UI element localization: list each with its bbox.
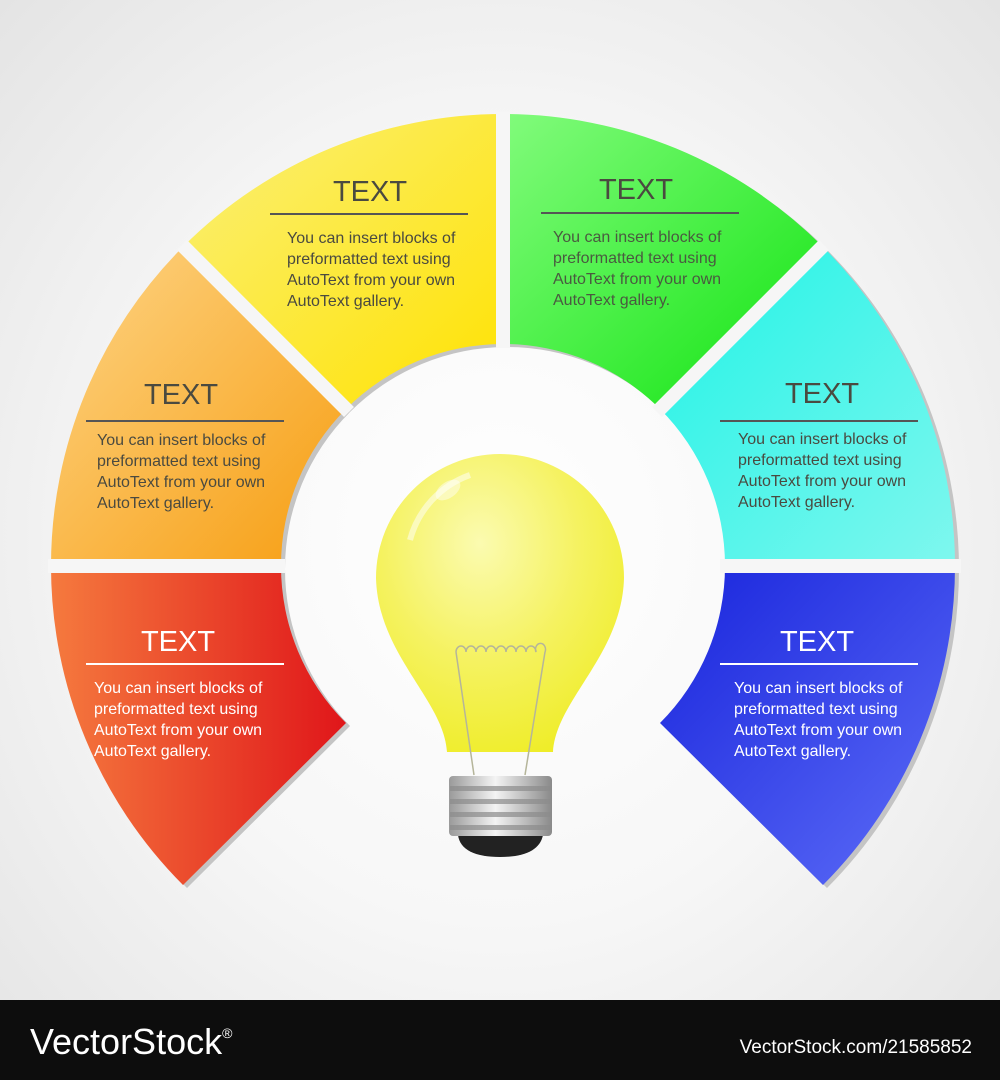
text: cyan: preformatted text using [738,452,902,469]
text: orange: AutoText gallery. [97,495,214,512]
text: red: preformatted text using [94,701,258,718]
text: red: TEXT [141,626,215,658]
footer bar: VectorStock [30,1021,222,1062]
text: cyan [720,378,918,511]
text: red: You can insert blocks of [94,680,263,697]
text: blue: TEXT [780,626,854,658]
text: orange: TEXT [144,379,218,411]
text: green: AutoText gallery. [553,292,670,309]
text: blue [720,626,918,760]
text: orange: preformatted text using [97,453,261,470]
footer bar: VectorStock.com/21585852 [740,1037,972,1058]
text: red: AutoText gallery. [94,743,211,760]
text: orange: AutoText from your own [97,474,265,491]
icon: light bulb [376,454,624,857]
footer bar [0,1000,1000,1080]
panel: cyan segment [660,246,959,569]
text: green [541,174,739,309]
text: blue: AutoText from your own [734,722,902,739]
panel: orange segment [51,246,350,569]
text: green: TEXT [599,174,673,206]
text: yellow: AutoText from your own [287,272,455,289]
text: cyan: AutoText gallery. [738,494,855,511]
text: yellow: You can insert blocks of [287,230,456,247]
text: red: AutoText from your own [94,722,262,739]
text: cyan: You can insert blocks of [738,431,907,448]
text: cyan: AutoText from your own [738,473,906,490]
text: yellow: AutoText gallery. [287,293,404,310]
panel: green segment [503,114,827,412]
text: red [86,626,284,760]
footer bar: ® [222,1025,233,1041]
text: orange: You can insert blocks of [97,432,266,449]
panel: blue segment [660,566,959,888]
panel: red segment [51,566,350,888]
text: yellow [270,176,468,310]
text: green: You can insert blocks of [553,229,722,246]
text: cyan: TEXT [785,378,859,410]
text: green: AutoText from your own [553,271,721,288]
text: orange [86,379,284,512]
text: blue: AutoText gallery. [734,743,851,760]
text: yellow: TEXT [333,176,407,208]
panel: yellow segment [183,114,507,412]
text: blue: preformatted text using [734,701,898,718]
text: green: preformatted text using [553,250,717,267]
text: yellow: preformatted text using [287,251,451,268]
text: blue: You can insert blocks of [734,680,903,697]
